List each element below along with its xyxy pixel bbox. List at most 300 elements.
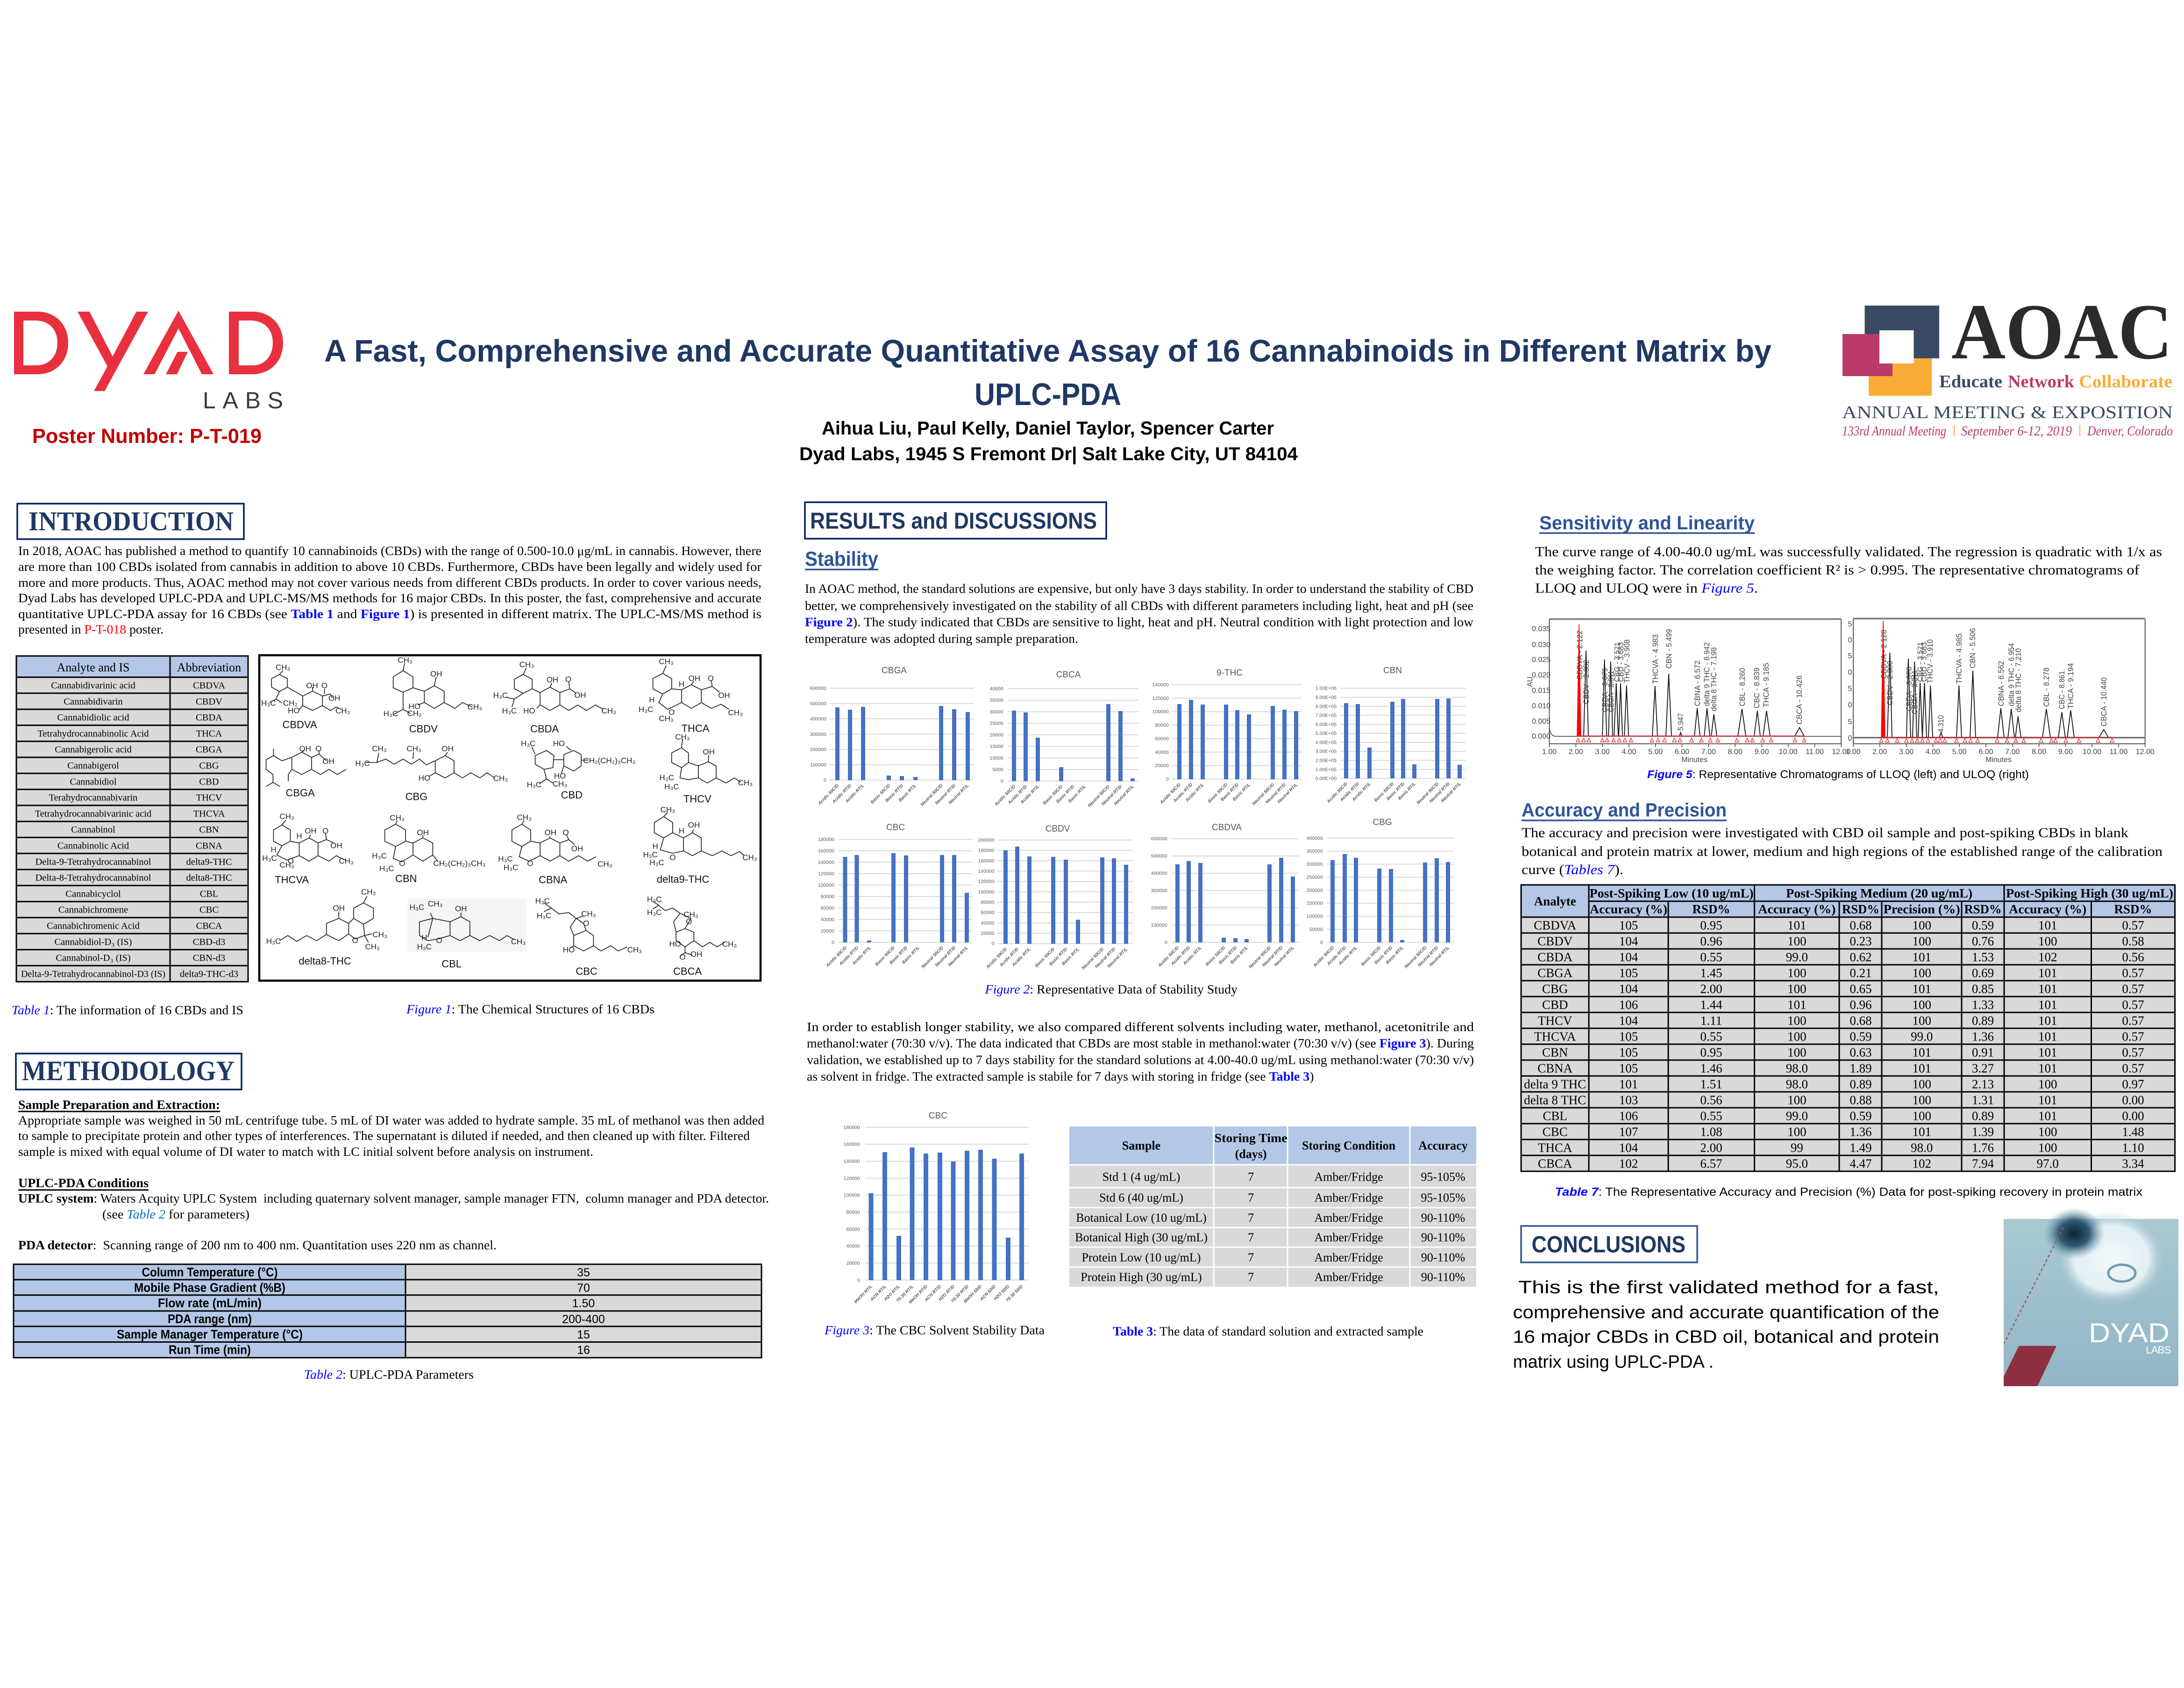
- structure: CBNA: O: [527, 859, 534, 868]
- table 7: accuracy and precision data: 0.68: [1850, 919, 1872, 933]
- chart: CBC: Basic 50C/D: [875, 945, 896, 967]
- structure: CBD: CBD: [561, 789, 583, 801]
- structure: CBNA: [498, 813, 612, 886]
- chart: 9-THC: Basic 50C/D: [1207, 782, 1229, 804]
- table 7: accuracy and precision data: Accuracy (%): [1590, 902, 1667, 916]
- structure: CBDA: OH: [574, 691, 586, 699]
- text: sample preparation: sample is mixed with equal volume of DI water to match with LC initial solvent before analysis on instrument.: [18, 1145, 593, 1159]
- table 3: standard solution and extracted sample: Protein High (30 ug/mL): [1081, 1270, 1202, 1284]
- table 7: accuracy and precision data: 0.00: [2122, 1093, 2144, 1107]
- chart: CBDV: 140000: [978, 869, 995, 874]
- chart: CBDV: Acidic 50C/D: [985, 947, 1008, 970]
- authors and affiliation: Aihua Liu, Paul Kelly, Daniel Taylor, Spencer Carter: [822, 418, 1274, 439]
- table 7: accuracy and precision data: 0.21: [1850, 966, 1872, 980]
- structure: CBNA: CH₃: [598, 860, 612, 869]
- chart: CBDV: 180000: [978, 848, 995, 854]
- chart: CBN: Basic RT/L: [1397, 781, 1417, 801]
- chart: CBG: 400000: [1307, 835, 1323, 841]
- text: accuracy paragraph: [1522, 825, 2163, 877]
- table 7: accuracy and precision data: 0.95: [1700, 1046, 1722, 1060]
- text: accuracy paragraph: curve (Tables 7 ).: [1522, 862, 1623, 877]
- table 7: accuracy and precision data: 0.57: [2122, 998, 2144, 1012]
- logo: AOAC annual meeting: AOAC: [1951, 288, 2172, 376]
- chart: CBCA: Neutral RT/L: [1113, 784, 1135, 806]
- image: Dyad Labs droplet graphic: [2004, 1208, 2178, 1386]
- table 2: UPLC-PDA parameters: Run Time (min): [169, 1343, 251, 1357]
- chart: CBGA: 0: [824, 777, 826, 783]
- table 7: accuracy and precision data: 104: [1619, 934, 1638, 948]
- figure 3: CBC solvent stability chart: ACN 50/D: [979, 1284, 997, 1302]
- figure 3: CBC solvent stability chart: 40000: [846, 1244, 860, 1249]
- logo: AOAC annual meeting: Educate: [1939, 372, 2002, 392]
- chart: CBDVA: 600000: [1151, 836, 1167, 842]
- table 7: accuracy and precision data: 105: [1619, 1061, 1638, 1075]
- structure: CBCA: H₃C: [647, 895, 662, 904]
- chart: 9-THC: 20000: [1155, 763, 1169, 769]
- table 7: accuracy and precision data: 0.91: [1972, 1046, 1994, 1060]
- chart: CBCA: 25000: [989, 721, 1003, 726]
- table 7: accuracy and precision data: CBNA: [1537, 1061, 1573, 1075]
- chart: CBG: 50000: [1309, 927, 1323, 933]
- structure: CBCA: HO: [669, 940, 681, 948]
- structure: CBG: CH₃: [406, 744, 421, 753]
- figure 5: LLOQ chromatogram (left): CBL - 8.260: [1738, 668, 1747, 706]
- structure: CBDA: OH: [547, 675, 558, 684]
- structure: CBN: CH₃: [390, 813, 405, 822]
- structure: CBDVA: H₃C: [261, 698, 276, 707]
- table 1: analytes and abbreviations: CBGA: [196, 745, 222, 755]
- table 7: accuracy and precision data: 101: [2038, 1109, 2057, 1123]
- chart: CBN: Neutral RT/D: [1429, 781, 1451, 804]
- chart: 9-THC: [1152, 668, 1302, 806]
- chart: CBGA: CBGA: [882, 666, 907, 676]
- table 1: analytes and abbreviations: CBL: [200, 889, 218, 899]
- structure: CBDA: HO: [523, 706, 535, 715]
- table 7: accuracy and precision data: 0.58: [2122, 934, 2144, 948]
- structure: CBDV: CH₃: [468, 702, 482, 711]
- table 1: analytes and abbreviations: Tetrahydrocannabinolic Acid: [37, 728, 149, 739]
- table 7: accuracy and precision data: 0.55: [1700, 1109, 1722, 1123]
- structure: CBN: O: [399, 859, 405, 868]
- chart: CBDV: Neutral RT/L: [1107, 947, 1129, 969]
- structure: THCVA: CH₃: [279, 861, 294, 869]
- structure: THCA: OH: [689, 674, 700, 683]
- structure: CBDA: H₃C: [493, 691, 508, 700]
- structure: THCA: THCA: [682, 723, 710, 734]
- chart: CBC: 40000: [821, 917, 834, 922]
- table 7: accuracy and precision data: 0.76: [1972, 934, 1994, 948]
- figure 5: ULOQ chromatogram (right): CBN - 5.506: [1968, 628, 1977, 668]
- chart: CBC: Acidic RT/D: [838, 945, 860, 967]
- figure 5: ULOQ chromatogram (right): 1.00: [1846, 748, 1861, 756]
- structure: CBCA: CH₃: [683, 910, 698, 919]
- structure: THCA: H₃C: [639, 705, 653, 714]
- table 1: analytes and abbreviations: Cannabigerol: [67, 761, 119, 771]
- structure: CBL: CH₃: [511, 937, 526, 946]
- structure: CBG: CBG: [405, 791, 427, 803]
- structure: THCVA: O: [322, 826, 328, 835]
- caption: table 2: Table 2: UPLC-PDA Parameters: [304, 1367, 474, 1382]
- table 1: analytes and abbreviations: Cannabidivarin: [64, 697, 123, 707]
- table 7: accuracy and precision data: 104: [1619, 1014, 1638, 1028]
- table 7: accuracy and precision data: THCA: [1538, 1141, 1572, 1155]
- table 7: accuracy and precision data: 1.31: [1972, 1093, 1994, 1107]
- structure: CBNA: H₃C: [498, 855, 513, 863]
- figure 5: LLOQ chromatogram (left): CBCA - 10.426: [1795, 676, 1804, 725]
- table 1: analytes and abbreviations: delta8-THC: [186, 873, 232, 883]
- chart: CBN: Neutral 50C/D: [1416, 781, 1440, 805]
- structure: delta9-THC: H: [653, 842, 658, 851]
- chart: CBN: Basic RT/D: [1386, 781, 1406, 801]
- structure: THCA: H: [649, 696, 654, 705]
- chart: CBGA: 600000: [810, 686, 826, 691]
- structure: CBDVA: CBDVA: [283, 719, 317, 731]
- text: sensitivity paragraph: The curve range of 4.00-40.0 ug/mL was successfully validated. The regression is quadratic with 1/x as: [1535, 544, 2162, 560]
- table 3: standard solution and extracted sample: Amber/Fridge: [1314, 1191, 1383, 1204]
- chart: CBC: 0: [832, 940, 834, 945]
- chart: 9-THC: Acidic RT/D: [1172, 782, 1194, 804]
- text: conclusions paragraph: 16 major CBDs in CBD oil, botanical and protein: [1513, 1327, 1939, 1347]
- chart: CBDVA: 300000: [1151, 888, 1167, 894]
- chart: CBG: CBG: [1373, 818, 1392, 827]
- table 2: UPLC-PDA parameters: Column Temperature (°C): [142, 1265, 277, 1279]
- structure: CBDA: O: [565, 675, 571, 684]
- table 7: accuracy and precision data: RSD%: [1692, 902, 1730, 916]
- subheading: sensitivity and linearity: Sensitivity and Linearity: [1539, 512, 1755, 534]
- chart: CBGA: 500000: [810, 701, 826, 706]
- caption: figure 1: Figure 1: The Chemical Structures of 16 CBDs: [406, 1002, 654, 1016]
- table 3: standard solution and extracted sample: Accuracy: [1418, 1139, 1468, 1153]
- structure: CBDV: CBDV: [409, 723, 438, 734]
- table 7: accuracy and precision data: 100: [1787, 966, 1807, 980]
- table 7: accuracy and precision data: 101: [1787, 998, 1807, 1012]
- figure 3: CBC solvent stability chart: 70:30 RT/D: [950, 1284, 970, 1304]
- table 7: accuracy and precision data: 104: [1619, 982, 1638, 996]
- table 7: accuracy and precision data: 101: [2038, 966, 2057, 980]
- chart: CBDV: Neutral RT/D: [1094, 947, 1117, 969]
- table 7: accuracy and precision data: 102: [2038, 950, 2057, 964]
- structure: CBG: [355, 744, 508, 803]
- table 2: UPLC-PDA parameters: 15: [577, 1328, 590, 1341]
- structure: delta9-THC: [643, 805, 757, 885]
- chart: CBN: 3.00E+05: [1316, 749, 1337, 755]
- chart: CBG: Acidic RT/D: [1326, 945, 1347, 967]
- figure 5: ULOQ chromatogram (right): 10.00: [2083, 748, 2101, 756]
- chart: CBG: 250000: [1307, 875, 1323, 880]
- chart: CBDV: Basic RT/D: [1048, 947, 1068, 967]
- figure 5: LLOQ chromatogram (left): 10.00: [1779, 748, 1798, 756]
- chart: CBDV: Acidic RT/D: [998, 947, 1020, 968]
- chart: CBDVA: Neutral RT/L: [1273, 945, 1295, 968]
- table 7: accuracy and precision data: 101: [2038, 1030, 2057, 1044]
- panel: conclusions: [1513, 1208, 2178, 1386]
- table 2: UPLC-PDA parameters: Sample Manager Temperature (°C): [117, 1327, 303, 1341]
- chart: CBG: Neutral RT/L: [1429, 945, 1451, 968]
- table 1: analytes and abbreviations: Cannabinolic Acid: [57, 841, 129, 851]
- table 7: accuracy and precision data: 100: [1787, 1030, 1807, 1044]
- table 7: accuracy and precision data: 1.89: [1850, 1061, 1872, 1075]
- table 1: analytes and abbreviations: delta9-THC: [186, 857, 232, 867]
- structure: THCVA: H₃C: [262, 854, 277, 863]
- heading: results and discussions: [805, 502, 1106, 539]
- structure: delta8-THC: delta8-THC: [299, 955, 351, 967]
- table 7: accuracy and precision data: 0.97: [2122, 1077, 2144, 1091]
- table 1: analytes and abbreviations: THCVA: [193, 809, 225, 819]
- table 7: accuracy and precision data: 3.34: [2122, 1157, 2144, 1171]
- structure: delta8-THC: CH₃: [361, 887, 376, 896]
- table 7: accuracy and precision data: RSD%: [1964, 902, 2001, 916]
- figure 3: CBC solvent stability chart: CBC: [929, 1111, 947, 1121]
- chart: CBDVA: Acidic RT/D: [1170, 945, 1191, 967]
- chart: CBG: Neutral 50C/D: [1403, 945, 1428, 969]
- chart: 9-THC: 0: [1166, 776, 1169, 782]
- table 7: accuracy and precision data: 100: [1787, 934, 1807, 948]
- title: [324, 334, 1771, 412]
- heading: introduction: INTRODUCTION: [28, 506, 234, 536]
- table 7: accuracy and precision data: 101: [1912, 982, 1931, 996]
- table 7: accuracy and precision data: 0.57: [2122, 966, 2144, 980]
- chart: CBN: Acidic RT/D: [1339, 781, 1360, 803]
- chart: CBDVA: Basic 50C/D: [1205, 945, 1226, 967]
- structure: THCA: CH₃: [659, 714, 674, 723]
- table 7: accuracy and precision data: CBDVA: [1534, 919, 1577, 933]
- figure 5: ULOQ chromatogram (right): CBG - 3.521: [1916, 642, 1925, 682]
- chart: CBDV: 0: [992, 941, 995, 947]
- text: UPLC-PDA conditions: [18, 1176, 769, 1252]
- table 7: accuracy and precision data: 101: [2038, 1061, 2057, 1075]
- structure: CBDA: CH₃: [519, 660, 534, 669]
- chart: CBGA: Acidic RT/L: [844, 783, 865, 805]
- figure 5: ULOQ chromatogram (right): CBCA - 10.440: [2099, 677, 2108, 726]
- text: introduction paragraph: Dyad Labs has developed UPLC-PDA and UPLC-MS/MS methods for 16 major CBDs. In this poster, the fast, comprehensive and accurate: [18, 591, 761, 605]
- chart: CBDV: 160000: [978, 858, 995, 864]
- table 3: standard solution and extracted sample: 7: [1248, 1251, 1254, 1264]
- structure: CBG: HO: [419, 774, 430, 783]
- subheading: stability: Stability: [805, 548, 878, 570]
- chart: CBCA: Neutral RT/D: [1101, 784, 1123, 807]
- figure 5: ULOQ chromatogram (right): 4.00: [1926, 748, 1940, 756]
- table 7: accuracy and precision data: 100: [1787, 1093, 1807, 1107]
- chart: CBCA: Basic 50C/D: [1042, 784, 1064, 806]
- panel: results and discussions: [805, 502, 1476, 1339]
- structure: CBG: H₃C: [355, 759, 370, 768]
- figure 3: CBC solvent stability chart: H2O RT/L: [883, 1284, 901, 1302]
- chart: 9-THC: 80000: [1155, 723, 1169, 728]
- table 1: analytes and abbreviations: delta9-THC-d3: [180, 969, 238, 979]
- table 7: accuracy and precision data: 101: [2038, 919, 2057, 933]
- chart: CBG: [1307, 818, 1454, 969]
- table 7: accuracy and precision data: CBG: [1542, 982, 1568, 996]
- table 7: accuracy and precision data: 100: [1787, 1125, 1807, 1139]
- structure: CBC: HO: [563, 945, 575, 954]
- table 1: analytes and abbreviations: THCV: [196, 793, 222, 803]
- logo: AOAC annual meeting: Network: [2008, 372, 2075, 392]
- structure: THCV: H₃C: [659, 773, 674, 782]
- figure 5: LLOQ chromatogram (left): 0.025: [1532, 656, 1551, 664]
- table 7: accuracy and precision data: 106: [1619, 1109, 1638, 1123]
- figure 5: LLOQ chromatogram (left): CBN - 5.499: [1665, 629, 1673, 669]
- structure: THCVA: CH₃: [279, 812, 294, 821]
- table 7: accuracy and precision data: 0.96: [1700, 934, 1722, 948]
- figure 3: CBC solvent stability chart: MeOH 50/D: [963, 1284, 983, 1304]
- figure 5: ULOQ chromatogram (right): 0: [1848, 701, 1852, 709]
- table 7: accuracy and precision data: CBD: [1542, 998, 1568, 1012]
- table 7: accuracy and precision data: 0.57: [2122, 982, 2144, 996]
- table 7: accuracy and precision data: 98.0: [1911, 1141, 1933, 1155]
- figure 5: LLOQ chromatogram (left): CBDV - 2.382: [1582, 660, 1591, 704]
- text: introduction paragraph: [18, 544, 761, 636]
- table 1: analytes and abbreviations: Cannabidiolic acid: [57, 712, 129, 723]
- structure: CBN: CH₂(CH₂)₃CH₃: [434, 859, 485, 868]
- table 1: analytes and abbreviations: CBDV: [196, 697, 222, 707]
- structure: CBDA: H₃C: [502, 706, 517, 715]
- table 7: accuracy and precision data: 100: [1912, 1093, 1931, 1107]
- figure 5: LLOQ chromatogram (left): 5.947: [1676, 713, 1685, 731]
- chart: CBC: Basic RT/D: [889, 945, 909, 965]
- table 7: accuracy and precision data: Post-Spiking Medium (20 ug/mL): [1786, 886, 1972, 900]
- structure: CBL: CBL: [441, 958, 462, 969]
- figure 3: CBC solvent stability chart: H2O 50/D: [993, 1284, 1010, 1302]
- table 7: accuracy and precision data: 99.0: [1786, 950, 1808, 964]
- structure: CBDA: [493, 660, 616, 734]
- table 2: UPLC-PDA parameters: [14, 1264, 761, 1358]
- structure: CBDVA: CH₃: [335, 706, 350, 715]
- logo: AOAC annual meeting: ANNUAL MEETING & EXPOSITION: [1842, 403, 2173, 422]
- figure 5: ULOQ chromatogram (right): CBC - 8.861: [2057, 671, 2066, 709]
- chart: CBCA: Acidic 50C/D: [994, 784, 1017, 807]
- figure 3: CBC solvent stability chart: 70:30 RT/L: [895, 1284, 915, 1303]
- figure 5: LLOQ chromatogram (left): 4.00: [1622, 748, 1636, 756]
- chart: CBN: 5.00E+05: [1316, 731, 1337, 736]
- table 7: accuracy and precision data: 2.00: [1700, 982, 1722, 996]
- table 1: analytes and abbreviations: Cannabigerolic acid: [55, 745, 132, 755]
- figure 5: ULOQ chromatogram (right): delta 9 THC - 6.954: [2007, 643, 2016, 706]
- structure: CBC: CH₃: [627, 945, 642, 954]
- table 7: accuracy and precision data: 104: [1619, 950, 1638, 964]
- figure 5: ULOQ chromatogram (right): 5: [1848, 620, 1852, 628]
- title: A Fast, Comprehensive and Accurate Quantitative Assay of 16 Cannabinoids in Different Matrix by: [324, 334, 1771, 369]
- chart: CBGA: Neutral 50C/D: [919, 783, 944, 807]
- structure: CBN: H₃C: [379, 864, 394, 873]
- structure: delta8-THC: [266, 887, 387, 967]
- chart: CBC: 60000: [821, 905, 834, 911]
- table 7: accuracy and precision data: 100: [1787, 1046, 1807, 1060]
- figure 5: LLOQ chromatogram (left): CBD - 3.683: [1616, 642, 1625, 682]
- text: sample preparation: [18, 1098, 765, 1159]
- structure: CBNA: O: [563, 828, 569, 837]
- chart: CBDVA: [1151, 823, 1299, 969]
- structure: delta8-THC: H₃C: [266, 937, 281, 946]
- structure: delta8-THC: OH: [333, 904, 345, 913]
- chart: CBC: 20000: [821, 928, 834, 934]
- structure: CBC: [535, 897, 642, 977]
- figure 5: ULOQ chromatogram (right): CBD - 3.683: [1920, 642, 1928, 682]
- table 7: accuracy and precision data: 0.55: [1700, 1030, 1722, 1044]
- figure 3: CBC solvent stability chart: ACN RT/D: [924, 1284, 942, 1303]
- text: sample preparation: Appropriate sample was weighed in 50 mL centrifuge tube. 5 mL of DI water was added to hydrate sample. 35 mL of methanol was then added: [18, 1113, 765, 1127]
- table 1: analytes and abbreviations: Tetrahydrocannabivarinic acid: [35, 809, 151, 819]
- table 7: accuracy and precision data: 99.0: [1786, 1109, 1808, 1123]
- table 7: accuracy and precision data: CBC: [1543, 1125, 1568, 1139]
- chart: CBCA: Acidic RT/L: [1019, 784, 1040, 805]
- chart: CBGA: 300000: [810, 732, 826, 737]
- table 3: standard solution and extracted sample: Std 1 (4 ug/mL): [1103, 1170, 1180, 1184]
- chart: CBDVA: Acidic RT/L: [1182, 945, 1203, 967]
- structure: CBDV: [384, 656, 482, 734]
- chart: CBG: 200000: [1307, 888, 1323, 893]
- table 2: UPLC-PDA parameters: 200-400: [562, 1313, 605, 1326]
- chart: CBN: 8.00E+05: [1316, 704, 1337, 709]
- table 2: UPLC-PDA parameters: Flow rate (mL/min): [158, 1296, 262, 1310]
- table 7: accuracy and precision data: 100: [1912, 998, 1931, 1012]
- chart: CBGA: Acidic 50C/D: [817, 783, 840, 806]
- figure 5: ULOQ chromatogram (right): 5: [1848, 685, 1852, 693]
- structure: CBDV: CH₃: [398, 656, 413, 665]
- figure 5: ULOQ chromatogram (right): 5.00: [1952, 748, 1967, 756]
- chart: CBN: 1.00E+05: [1316, 767, 1337, 772]
- structure: THCA: CH₃: [659, 657, 674, 666]
- chart: CBGA: 100000: [810, 762, 826, 768]
- panel: accuracy and precision: [1521, 799, 2175, 1199]
- structure: CBL: O: [436, 936, 442, 945]
- table 2: UPLC-PDA parameters: 1.50: [572, 1297, 595, 1310]
- table 1: analytes and abbreviations: CBD: [199, 776, 219, 787]
- chart: CBN: 9.00E+05: [1316, 695, 1337, 700]
- chart: 9-THC: Neutral RT/D: [1265, 782, 1287, 805]
- structure: CBC: CH₃: [581, 909, 596, 918]
- table 1: analytes and abbreviations: Cannabinol: [71, 825, 115, 835]
- figure 5: LLOQ chromatogram (left): 0.010: [1532, 702, 1551, 710]
- figure 3: CBC solvent stability chart: H2O RT/D: [938, 1284, 956, 1302]
- table 7: accuracy and precision data: 105: [1619, 919, 1638, 933]
- table 7: accuracy and precision data: 1.45: [1700, 966, 1722, 980]
- table 7: accuracy and precision data: 0.62: [1850, 950, 1872, 964]
- structure: CBL: H: [421, 933, 427, 942]
- logo: AOAC annual meeting: September 6-12, 2019: [1961, 423, 2072, 439]
- table 7: accuracy and precision data: 1.46: [1700, 1061, 1722, 1075]
- caption: table 1: Table 1: The information of 16 CBDs and IS: [12, 1003, 243, 1017]
- table 7: accuracy and precision data: 100: [1912, 1077, 1931, 1091]
- figure 5: ULOQ chromatogram (right): CBDVA - 2.128: [1879, 630, 1888, 679]
- structure: CBDVA: O: [321, 681, 327, 690]
- table 7: accuracy and precision data: 98.0: [1786, 1077, 1808, 1091]
- table 7: accuracy and precision data: CBL: [1543, 1109, 1567, 1123]
- text: introduction paragraph: are more than 100 CBDs isolated from cannabis in addition to above 10 CBDs. Furthermore, CBDs have been legally and widely used for: [18, 560, 761, 574]
- structure: CBN: CBN: [395, 873, 417, 884]
- table 7: accuracy and precision data: 0.63: [1850, 1046, 1872, 1060]
- panel: methodology: [14, 1054, 769, 1382]
- figure 5: LLOQ chromatogram (left): 0.035: [1532, 625, 1551, 633]
- table 7: accuracy and precision data: 101: [2038, 982, 2057, 996]
- table 1: analytes and abbreviations: Delta-8-Tetrahydrocannabinol: [36, 873, 151, 883]
- figure 5: ULOQ chromatogram (right): CBDA - 3.078: [1905, 667, 1914, 711]
- figure 5: LLOQ chromatogram (left): CBG - 3.521: [1613, 642, 1622, 682]
- table 7: accuracy and precision data: 2.13: [1972, 1077, 1994, 1091]
- chart: CBN: 4.00E+05: [1316, 740, 1337, 745]
- table 7: accuracy and precision data: CBCA: [1538, 1157, 1572, 1171]
- chart: CBC: 120000: [818, 871, 834, 876]
- table 7: accuracy and precision data: 98.0: [1786, 1061, 1808, 1075]
- chart: CBC: Acidic 50C/D: [825, 945, 848, 969]
- structure: CBDVA: OH: [306, 681, 318, 690]
- table 1: analytes and abbreviations: CBN-d3: [193, 953, 225, 963]
- table 3: standard solution and extracted sample: Std 6 (40 ug/mL): [1099, 1191, 1183, 1204]
- structure: CBCA: OH: [690, 950, 702, 959]
- structure: THCVA: H: [270, 845, 277, 854]
- structure: THCV: CH₃: [675, 733, 690, 741]
- table 1: analytes and abbreviations: Cannabidivarinic acid: [51, 680, 135, 691]
- chart: CBG: Acidic 50C/D: [1312, 945, 1335, 969]
